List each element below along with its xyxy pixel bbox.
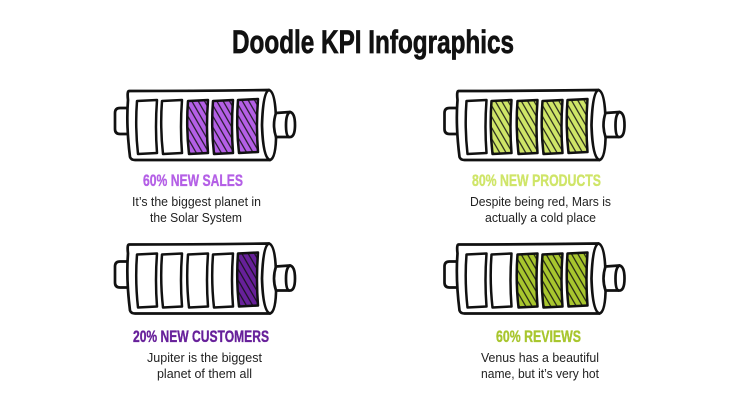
icon: battery 80% lime bbox=[444, 90, 624, 160]
label: 60% new sales: 60% NEW SALES bbox=[143, 172, 243, 190]
label: 20% new customers: 20% NEW CUSTOMERS bbox=[133, 328, 269, 346]
icon: battery 60% olive green bbox=[444, 244, 624, 314]
title: Doodle KPI Infographics bbox=[232, 24, 514, 60]
panel: reviews bbox=[444, 244, 624, 381]
description: reviews: name, but it’s very hot bbox=[481, 367, 599, 381]
panel: new sales bbox=[115, 90, 295, 225]
icon: battery 60% purple bbox=[115, 90, 295, 160]
description: new products: Despite being red, Mars is bbox=[470, 195, 611, 209]
label: 80% new products: 80% NEW PRODUCTS bbox=[472, 172, 601, 190]
description: new customers: Jupiter is the biggest bbox=[147, 351, 263, 365]
description: new customers: planet of them all bbox=[157, 367, 252, 381]
panel: new products bbox=[444, 90, 624, 225]
description: new sales: It’s the biggest planet in bbox=[132, 195, 261, 209]
description: new sales: the Solar System bbox=[150, 211, 242, 225]
description: new products: actually a cold place bbox=[485, 211, 596, 225]
description: reviews: Venus has a beautiful bbox=[481, 351, 599, 365]
panel: new customers bbox=[115, 244, 295, 381]
icon: battery 20% dark purple bbox=[115, 244, 295, 314]
label: 60% reviews: 60% REVIEWS bbox=[496, 328, 581, 346]
